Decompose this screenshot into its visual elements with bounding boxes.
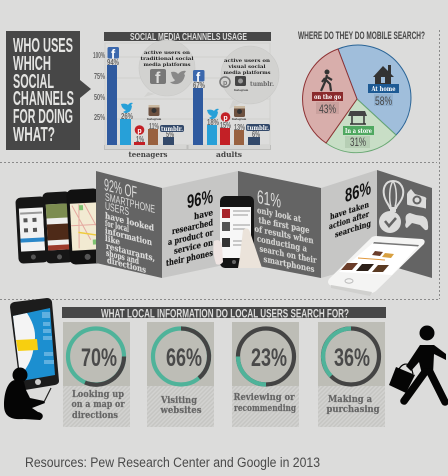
slice: on the go: on the go [314,94,341,101]
panel: 96% researched: researched [172,218,213,237]
tile: 70% [63,322,130,427]
tile: 66%: 66% [166,344,202,372]
bars: adults: Instagram [232,118,247,121]
source note: Resources: Pew Research Center and Google in 2013 [25,455,320,470]
bars: adults: 67% [193,80,205,90]
tile: 70%: on a map or [72,400,125,410]
panel: 96% researched [162,171,238,278]
panel: 86% action [321,170,377,278]
slice: in a store [343,111,374,149]
hand [238,228,262,268]
slice: on the go: 43% [319,102,336,116]
tile: 36%: 36% [334,344,370,372]
axis labels: 100% [93,51,105,60]
panel: social media channels usage [93,32,279,159]
bubble: traditional platforms: f [155,70,161,87]
tile: 36%: purchasing [326,405,380,415]
panel: 92% of smartphone users: information [105,226,153,248]
section heading [62,307,386,320]
bars: teenagers [107,47,184,145]
chart frame and grid [104,43,270,150]
phone 1 [15,196,49,264]
panel: 61% first page: the first page [258,216,310,236]
phone: black phone with hand [213,196,262,268]
panel: 92% of smartphone users [96,171,162,278]
icon: hot air balloon [384,181,403,212]
panel: 92% of smartphone users: USERS [105,200,129,218]
icon: camera [407,189,426,208]
title: who uses which social channels: FOR DOING [13,106,73,128]
bars: adults [193,70,270,145]
panel: 61% first page [238,171,321,278]
panel: 96% researched: 96% [187,187,213,213]
icon: check mark [379,211,401,233]
bars: teenagers: tumblr. [161,126,183,133]
group labels: teenagers [128,150,168,159]
title: who uses which social channels: SOCIAL [13,71,54,93]
axis labels: 25% [94,113,105,122]
phones: three smartphones [15,188,103,265]
bubble: visual platforms: visual social [227,64,266,70]
bars: teenagers: 1% [136,134,144,144]
bubble: visual platforms: active users on [224,58,270,64]
tile: 36% [318,322,385,427]
bars: adults: 13% [234,122,245,132]
group labels: adults [216,150,242,159]
icon: seated person with laptop [4,368,51,420]
panel: what local information [62,307,386,427]
pie chart [303,45,411,153]
icon: game controller [405,213,428,230]
tile: 23%: Reviewing or [234,393,295,403]
axis labels: 75% [94,72,105,81]
bars: teenagers: f [111,48,116,62]
tile: 70%: Looking up [72,390,124,400]
bars: adults: 15% [220,120,231,130]
panel: 92% of smartphone users: for local [105,219,129,235]
panel: 96% researched: have [194,208,213,222]
tile: 23% [232,322,299,427]
chart heading: SOCIAL MEDIA CHANNELS USAGE [130,32,247,43]
slice: in a store: 31% [350,135,366,149]
bubble: traditional platforms: media platforms [144,62,191,68]
panel: 92% of smartphone users: directions [107,256,146,276]
tile: 70%: 70% [81,344,117,372]
panel: 96% researched: a product or [168,228,213,248]
icon: large phone with wheel app [10,298,59,390]
slice: at home [368,65,399,108]
slice: at home: 58% [375,94,392,108]
slice: at home: At home [371,86,396,93]
tile: 70%: directions [72,411,118,421]
title: who uses which social channels [6,31,91,150]
panel: 86% action: 86% [345,177,371,207]
bars: teenagers: 26% [121,111,133,121]
panel: 96% researched: their phones [166,249,213,269]
bars: teenagers: 5% [166,129,174,139]
section heading: WHAT LOCAL INFORMATION DO LOCAL USERS SEARCH FOR? [101,308,349,320]
slice: on the go [312,70,343,116]
panel: 61% first page: only look at [257,206,301,225]
panel: 61% first page: smartphones [264,255,315,275]
phone: white smartphone [328,236,425,296]
icon: walking person with bag [389,326,446,402]
phone 2 [42,191,74,264]
panel: 61% first page: of results when [254,224,314,247]
axis labels [93,51,105,122]
panel: 61% first page: 61% [257,187,281,213]
bubble: visual platforms [220,46,279,109]
tile: 66%: websites [160,406,202,416]
bars: adults: tumblr. [247,125,269,132]
panel: 86% action: have taken [330,199,369,222]
bubble: visual platforms: p [223,80,227,87]
bubble: traditional platforms: traditional social [140,56,194,62]
panel: 92% of smartphone users: 92% OF [104,174,137,202]
bubble: visual platforms: media platforms [224,70,271,76]
bars: adults: 18% [207,117,219,127]
tile: 23%: 23% [251,344,287,372]
tile: 66%: Visiting [160,396,198,406]
tile: 23%: recommending [234,404,297,414]
panel: where do they do mobile search [298,30,425,153]
bars: adults: p [223,115,228,122]
bars: teenagers: p [137,128,142,135]
panel: 92% of smartphone users: SMARTPHONE [105,191,155,216]
tile: 36%: Making a [328,395,372,405]
bars: teenagers: 11% [149,121,159,131]
panel: 92% of smartphone users: like [105,234,120,248]
slice: in a store: In a store [345,128,372,135]
bubble: traditional platforms: active users on [144,50,190,56]
title: who uses which social channels: WHAT? [13,124,55,146]
panel: 92% of smartphone users: have looked [105,211,154,234]
bubble: visual platforms: Instagram [234,89,249,92]
panel: 86% action: searching [335,218,371,239]
bubble: visual platforms: tumblr. [250,81,274,88]
group labels [128,150,242,159]
bars: teenagers: Instagram [147,118,162,121]
axis labels: 50% [94,93,105,102]
title: who uses which social channels: WHICH [13,53,51,75]
panel: 92% of smartphone users: restaurants, [106,242,155,264]
bars: teenagers: 94% [107,57,119,67]
panel: action icons [377,170,432,278]
panel: 61% first page: search on their [260,244,317,266]
title: who uses which social channels: CHANNELS [13,88,74,110]
bars: adults: 6% [252,129,260,139]
tile: 66% [147,322,214,427]
panel: 96% researched: service on [174,238,214,257]
panel: 92% of smartphone users: shops and [106,249,139,267]
panel: 86% action: action after [329,208,370,231]
bars: adults: f [196,70,201,84]
title: who uses which social channels: WHO USES [13,35,73,57]
panel: 61% first page: conducting a [257,234,307,255]
bubble: traditional platforms [139,40,195,97]
phone 3 [66,188,103,265]
